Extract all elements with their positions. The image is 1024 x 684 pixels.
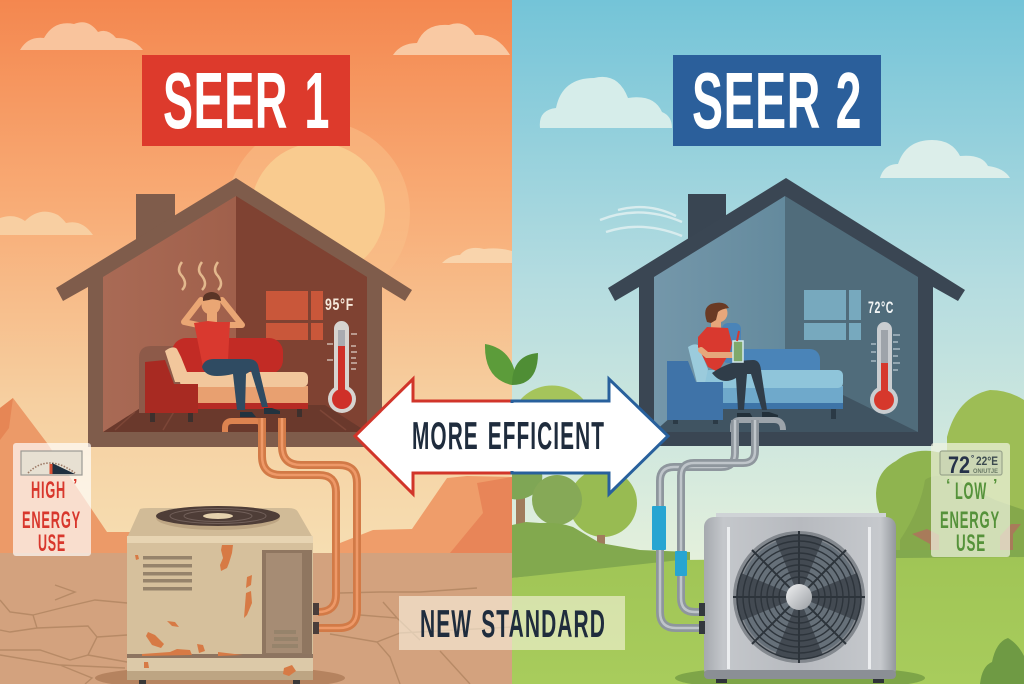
window <box>266 291 323 340</box>
card: high energy use: ’ <box>73 477 77 494</box>
icon: digital thermostat display: ON/UTJE <box>973 469 998 475</box>
panel: cool green background <box>512 0 1024 684</box>
icon: digital thermostat display: 22°E <box>976 454 998 468</box>
card: low energy use <box>931 443 1010 557</box>
icon: thermometer cool <box>870 322 900 414</box>
label: new standard <box>399 596 625 650</box>
heading: SEER 1: SEER 1 <box>163 56 330 145</box>
house: hot SEER 1 home <box>56 178 412 447</box>
card: high energy use <box>13 443 91 557</box>
window <box>804 290 861 340</box>
temperature label: 72°C <box>868 298 894 317</box>
fan guard <box>733 531 865 663</box>
temperature label: 95°F <box>325 295 354 314</box>
heading: SEER 2: SEER 2 <box>692 56 862 145</box>
person relaxing with drink <box>698 303 778 418</box>
pipes: insulated silver lines <box>652 420 783 628</box>
icon: digital thermostat display: ° <box>971 454 974 463</box>
rust patches <box>135 545 296 676</box>
card: low energy use: USE <box>956 530 986 557</box>
arrow: more efficient double arrow <box>355 379 668 494</box>
card: low energy use: ‘ <box>946 477 950 494</box>
heading: SEER 1 <box>142 55 350 146</box>
icon: green leaf <box>485 344 538 385</box>
connectors <box>313 603 319 615</box>
house: cool SEER 2 home <box>608 178 965 446</box>
icon: thermometer hot <box>327 321 357 413</box>
sofa red <box>139 338 308 422</box>
card: high energy use: ENERGY <box>22 507 81 534</box>
louvers <box>143 556 298 648</box>
arrow: more efficient double arrow: MORE EFFICIENT <box>412 415 605 458</box>
card: high energy use: USE <box>38 530 66 557</box>
trees behind the arrow <box>512 386 690 578</box>
icon: digital thermostat display <box>940 451 1002 479</box>
icon: energy gauge <box>21 451 82 475</box>
heat wavy lines <box>179 262 221 290</box>
panel: hot desert background <box>0 0 512 684</box>
card: high energy use: HIGH <box>31 477 66 504</box>
card: low energy use: ’ <box>993 477 997 494</box>
card: low energy use: LOW <box>955 478 987 505</box>
sofa blue <box>667 323 843 424</box>
person stressed by heat <box>184 292 280 417</box>
trees behind the energy card <box>876 390 1024 563</box>
icon: digital thermostat display: 72 <box>948 452 970 479</box>
label: new standard: NEW STANDARD <box>420 603 606 646</box>
fan grille <box>156 506 280 530</box>
pipes: copper refrigerant lines <box>225 418 357 628</box>
heading: SEER 2 <box>673 55 881 146</box>
outdoor unit: new silver SEER 2 heat pump <box>675 513 925 684</box>
outdoor unit: old rusty SEER 1 condenser <box>95 506 345 684</box>
